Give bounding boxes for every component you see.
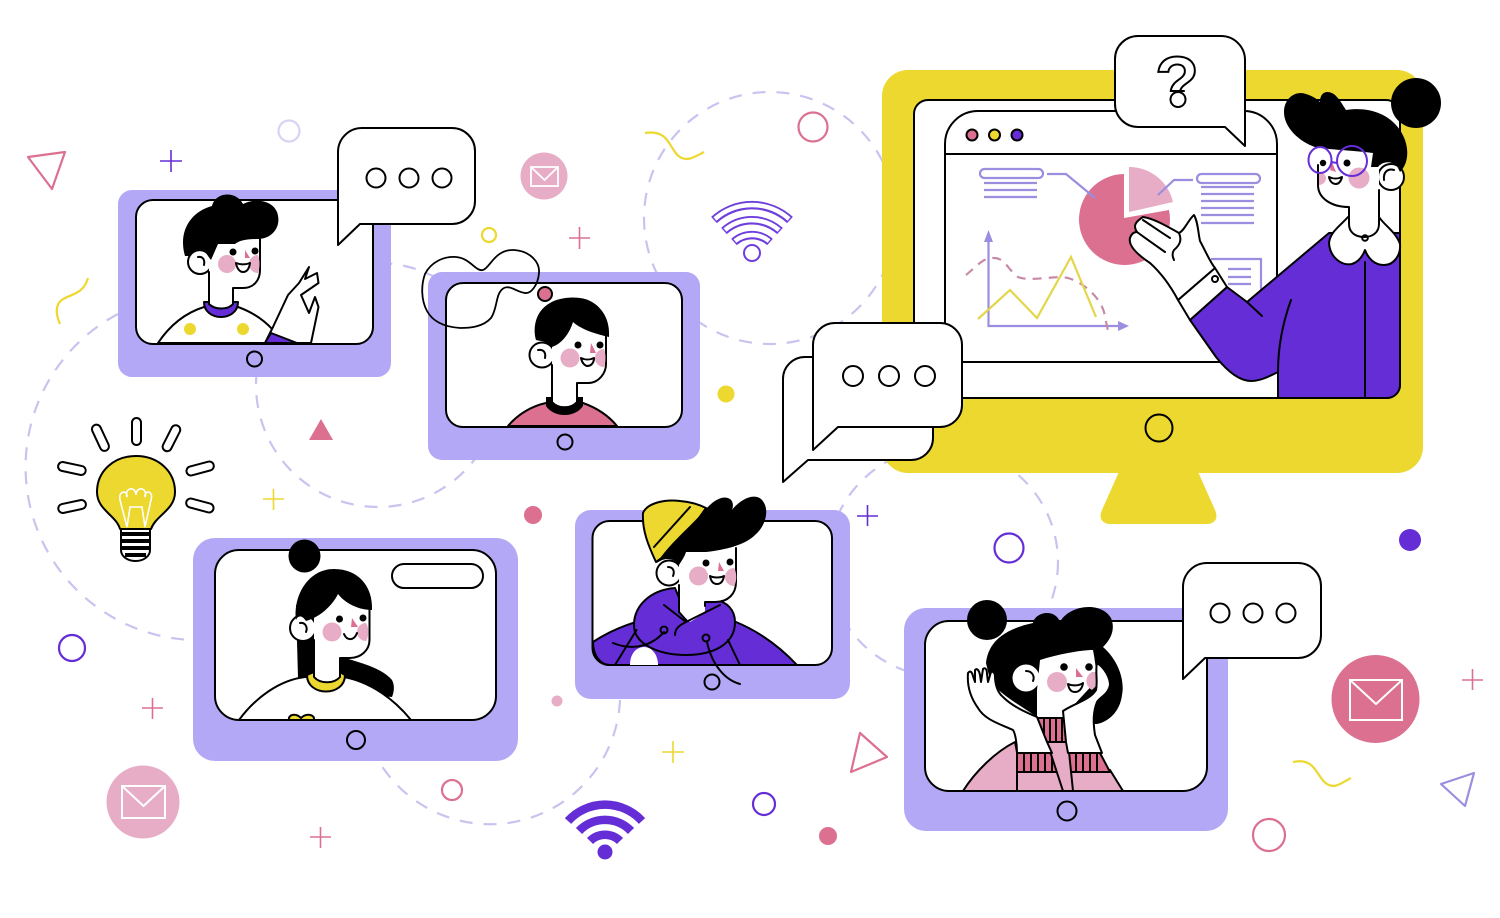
icon: mail bottom left bbox=[106, 766, 180, 838]
speech bubble: screen 1 bbox=[338, 128, 475, 245]
text block left bbox=[980, 169, 1043, 197]
browser window bbox=[945, 111, 1277, 362]
speech bubble: double chat bbox=[783, 323, 962, 482]
speech bubble: screen 5 bbox=[1183, 563, 1321, 679]
pie chart bbox=[1047, 167, 1193, 265]
panel: screen 4 boy with beanie bbox=[575, 497, 850, 699]
panel: screen 2 boy with thought bbox=[428, 272, 700, 460]
icon: light bulb bbox=[57, 418, 215, 561]
small document bbox=[1211, 259, 1261, 295]
panel: main monitor bbox=[882, 36, 1441, 524]
speech bubble: question mark: ? bbox=[1155, 43, 1199, 123]
speech bubble: question mark bbox=[1115, 36, 1245, 146]
panel: screen 1 boy waving bbox=[118, 190, 391, 377]
presenter figure bbox=[1130, 78, 1441, 398]
panel: screen 5 girl with hands on cheeks bbox=[904, 600, 1228, 831]
icon: mail small bbox=[520, 152, 568, 200]
icon: mail right bbox=[1332, 655, 1420, 743]
dashed connection circles bbox=[26, 92, 1058, 824]
panel: screen 3 girl with bun bbox=[193, 538, 518, 761]
decorative shapes bbox=[28, 112, 1483, 851]
icon: wifi outline bbox=[714, 205, 790, 261]
line chart bbox=[966, 230, 1129, 331]
icon: wifi solid bbox=[568, 805, 642, 860]
thought bubble outline bbox=[422, 250, 552, 328]
text block right bbox=[1197, 174, 1260, 223]
